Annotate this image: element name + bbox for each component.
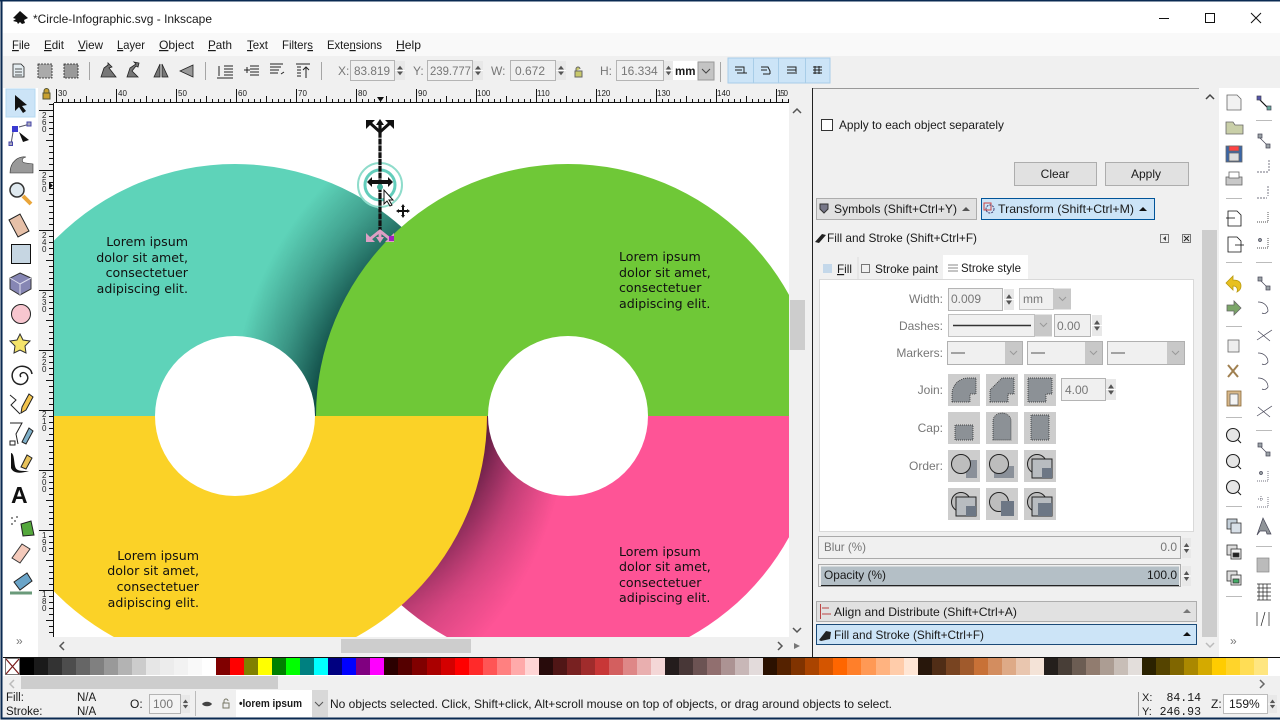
left ruler [38,103,54,637]
window controls [1159,13,1261,23]
top ruler: 30 [58,89,67,98]
icon: zoom tool [10,183,31,204]
width row: mm [1023,292,1043,306]
gradient handles [358,119,410,243]
icons: file operations [1226,95,1244,406]
blur slider: 0.0 [1160,540,1177,554]
text block: green: dolor sit amet, [619,265,711,280]
dashes row: 0.00 [1057,319,1081,333]
toolbar icons: selection and transform [13,62,193,78]
left ruler: 2 [42,471,47,480]
icon: star tool [10,334,30,353]
left ruler: 0 [42,125,47,134]
fill and stroke tabs: Fill [837,262,852,276]
text block: pink: adipiscing elit. [619,590,710,605]
left ruler: 4 [42,238,47,247]
coordinate fields: Y: [413,64,424,78]
top ruler: 100 [477,89,491,98]
menu bar: Help [396,38,421,52]
blur slider: Blur (%) [824,540,866,554]
dashes row: Dashes: [899,319,943,333]
transform options: Apply [1131,167,1161,181]
toolbar icons: layer order [217,64,310,78]
canvas horizontal scrollbar [54,637,812,658]
left ruler: 2 [42,351,47,360]
icons: snapping [1257,96,1272,626]
icon: calligraphy tool [11,453,32,473]
coordinate fields: mm [675,66,695,78]
colour palette [20,658,1268,675]
top ruler: 80 [358,89,367,98]
transform options: Clear [1041,167,1069,181]
icon: pencil tool [10,394,33,414]
top ruler: 130 [657,89,671,98]
text block: yellow: dolor sit amet, [107,563,199,578]
left ruler: 9 [42,538,47,547]
opacity field [130,691,196,716]
icon: paint bucket tool [10,573,32,593]
menu bar: Path [208,38,232,52]
icons: zoom [1226,428,1241,495]
cap row: Cap: [918,421,943,435]
markers row: Markers: [896,346,943,360]
text block: teal: dolor sit amet, [96,250,188,265]
left ruler: 1 [42,531,47,540]
fill and stroke indicator: N/A [77,692,96,704]
canvas vertical scrollbar [790,103,812,637]
top ruler: 70 [298,89,307,98]
coordinate fields: 83.819 [354,64,390,78]
left ruler: 0 [42,305,47,314]
coordinate fields: 239.777 [430,64,471,78]
toolbox overflow: » [16,634,23,648]
markers row [896,342,1184,364]
zoom field [1211,694,1277,714]
left ruler: 0 [42,185,47,194]
panel: yellow half ring [54,416,487,637]
blur slider [818,536,1191,558]
palette strip background [3,658,1280,676]
coordinate fields: 16.334 [621,64,658,78]
pointer coordinates: Y: [1142,706,1152,718]
palette horizontal scrollbar [3,676,1280,690]
pointer coordinates: 84.14 [1166,692,1201,705]
icon: measure tool [9,214,29,237]
left ruler: 2 [42,358,47,367]
icon: 3d box tool [10,273,31,295]
circle hole: left [155,336,315,496]
panel: green half ring [316,164,820,416]
dashes row [899,314,1102,336]
command toolbar [3,56,1280,88]
left ruler: 0 [42,424,47,433]
width row: 0.009 [951,292,981,306]
icon: bezier tool [10,423,33,445]
text block: pink: Lorem ipsum [619,544,701,559]
panel: teal half ring [54,164,402,416]
order row [909,450,1056,520]
menu bar: Object [159,38,195,52]
text block: yellow: Lorem ipsum [117,548,199,563]
panel: dialog dock [812,88,1199,658]
top ruler: 140 [717,89,731,98]
icon: node tool [9,122,31,146]
text block: green: adipiscing elit. [619,296,710,311]
dialog heading: Fill and Stroke (Shift+Ctrl+F) [827,231,977,245]
opacity slider: 100.0 [1147,568,1177,582]
menu bar: Extensions [327,38,382,52]
dock tab: transform: Transform (Shift+Ctrl+M) [998,202,1134,216]
top ruler: 40 [118,89,127,98]
canvas [54,103,789,637]
icon: text tool: A [11,482,28,508]
cap row [918,412,1056,444]
snap buttons [728,58,830,83]
icon: selector [15,95,27,113]
transform options [822,118,1188,186]
menu bar [3,33,1280,56]
icons: layers and locks [1227,519,1241,585]
order row: Order: [909,459,943,473]
left ruler: 2 [42,171,47,180]
panel: stroke style form [820,280,1194,532]
dialog heading [815,231,1190,245]
zoom field: 159% [1229,697,1260,711]
coordinate fields: 0.672 [515,64,545,78]
pointer coordinates: 246.93 [1160,706,1201,719]
text block: yellow: consectetuer [117,579,200,594]
text block: teal: Lorem ipsum [106,234,188,249]
icon: spray tool [11,517,34,536]
left ruler: 0 [42,245,47,254]
icon: tweak tool [10,157,33,173]
status message: No objects selected. Click, Shift+click, Alt+scroll mouse on top of objects, or drag around objects to select. [330,697,892,711]
left ruler: 0 [42,545,47,554]
fill and stroke indicator: N/A [77,706,96,718]
circle hole: right [488,336,648,496]
left ruler: 2 [42,410,47,419]
text block: yellow: adipiscing elit. [108,595,199,610]
icon: ellipse tool [12,304,30,324]
dock tab: symbols: Symbols (Shift+Ctrl+Y) [834,202,957,216]
left ruler: 2 [42,111,47,120]
command bar overflow: » [1230,634,1237,648]
left ruler: 0 [42,365,47,374]
icon: inkscape logo [13,11,28,24]
dock tab: symbols [816,198,976,220]
opacity field: 100 [153,697,173,711]
text block: pink: consectetuer [619,575,702,590]
layer controls: •lorem ipsum [239,698,302,710]
opacity slider: Opacity (%) [824,568,886,582]
width row [909,288,1071,310]
dock tab: fill and stroke [816,624,1196,644]
transform options: Apply to each object separately [839,118,1004,132]
dock tab: align and distribute: Align and Distribute (Shift+Ctrl+A) [834,605,1017,619]
top ruler [38,88,790,103]
panel: pink half ring [402,416,789,637]
left ruler: 0 [42,478,47,487]
dock tab: align and distribute [816,602,1196,622]
dock tab: transform [982,198,1154,220]
left ruler: 1 [42,590,47,599]
left ruler: 3 [42,298,47,307]
text block: teal: adipiscing elit. [97,281,188,296]
pointer coordinates [1138,692,1201,719]
fill and stroke indicator [6,692,96,718]
width row: Width: [909,292,943,306]
text block: pink: dolor sit amet, [619,559,711,574]
left ruler: 8 [42,597,47,606]
left ruler: 1 [42,417,47,426]
top ruler: 50 [178,89,187,98]
icon: spiral tool [12,366,32,384]
left ruler: 6 [42,118,47,127]
menu bar: Text [247,38,269,52]
left ruler: 2 [42,231,47,240]
fill and stroke indicator: Stroke: [6,706,42,718]
text block: green: Lorem ipsum [619,249,701,264]
opacity slider [818,564,1191,586]
right command bar [1219,88,1280,657]
text block: green: consectetuer [619,280,702,295]
left ruler: 0 [42,604,47,613]
menu bar: Layer [117,38,145,52]
window title: *Circle-Infographic.svg - Inkscape [33,12,212,26]
fill and stroke tabs: Stroke style [961,261,1021,275]
left ruler: 2 [42,291,47,300]
join row: 4.00 [1065,383,1089,397]
fill and stroke indicator: Fill: [6,692,24,704]
left toolbox [3,88,38,658]
menu bar: File [12,38,30,52]
fill and stroke tabs: Stroke paint [875,262,939,276]
icon: eraser tool [12,544,30,563]
menu bar: View [78,38,103,52]
join row: Join: [918,383,943,397]
pointer coordinates: X: [1142,692,1152,704]
top ruler: 120 [597,89,611,98]
dock scrollbar [1202,90,1218,656]
menu bar: Filters [282,38,313,52]
status bar [3,690,1280,719]
join row [918,374,1116,406]
coordinate fields: H: [600,64,612,78]
title bar [3,1,1280,33]
top ruler: 60 [238,89,247,98]
top ruler: 150 [777,89,789,98]
coordinate fields: W: [491,64,505,78]
left ruler: 5 [42,178,47,187]
coordinate fields [338,60,714,80]
zoom field: Z: [1211,697,1222,711]
layer controls [202,690,328,717]
top ruler: 90 [418,89,427,98]
coordinate fields: X: [338,64,349,78]
text block: teal: consectetuer [106,265,189,280]
top ruler: 110 [537,89,550,98]
fill and stroke tabs [823,255,1028,280]
opacity field: O: [130,697,143,711]
icon: rectangle tool [12,244,30,264]
menu bar: Edit [44,38,65,52]
dock tab: fill and stroke: Fill and Stroke (Shift+Ctrl+F) [834,628,984,642]
left ruler: 0 [42,485,47,494]
